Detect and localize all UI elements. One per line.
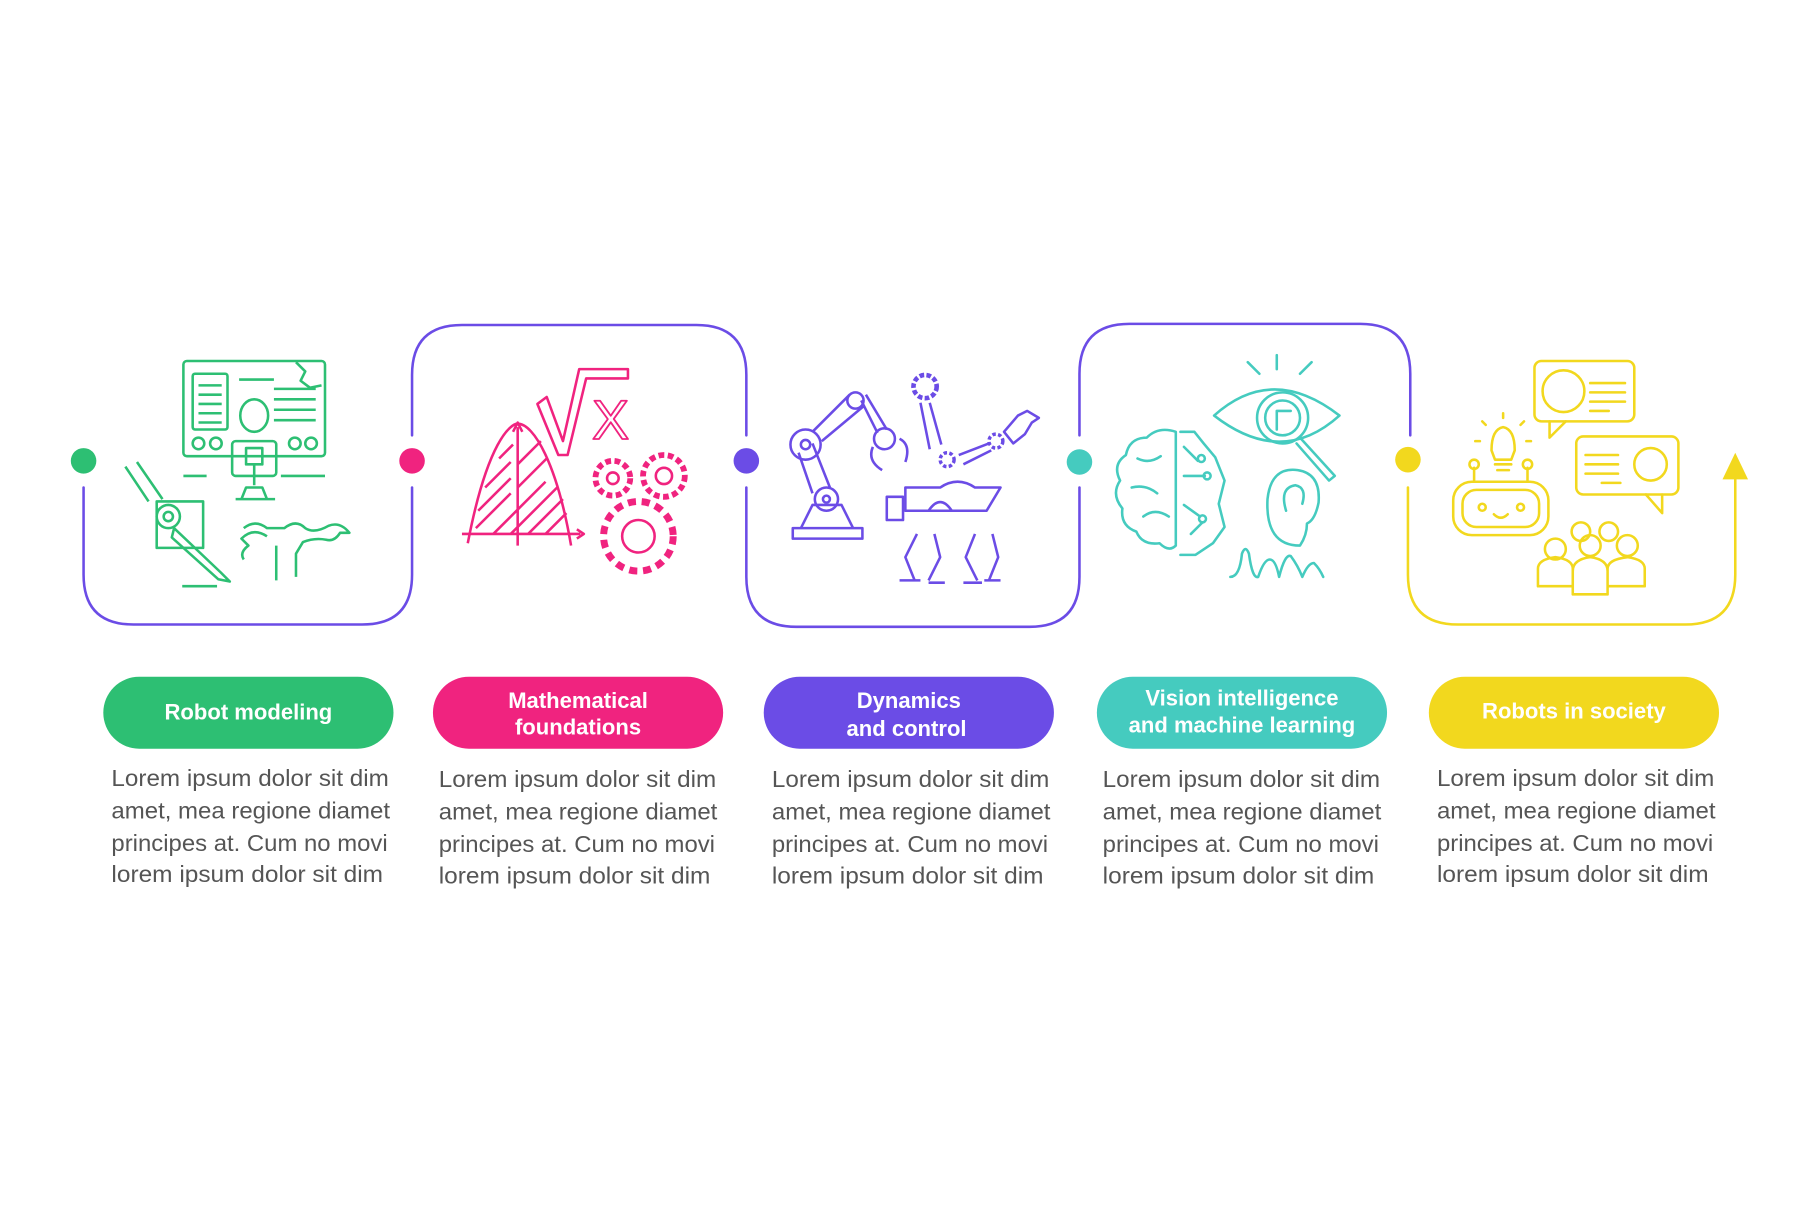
pill: Dynamics and control: Dynamics [857, 688, 961, 713]
dots [71, 447, 1421, 475]
text blocks: Lorem ipsum dolor sit dim [1437, 765, 1714, 791]
pill: Robot modeling: Robot modeling [165, 700, 332, 725]
text blocks: principes at. Cum no movi [439, 831, 715, 857]
text blocks: lorem ipsum dolor sit dim [111, 861, 383, 887]
text blocks: amet, mea regione diamet [1437, 797, 1716, 823]
icon: mathematical foundations [462, 369, 685, 571]
text blocks: lorem ipsum dolor sit dim [439, 862, 710, 888]
text blocks: Lorem ipsum dolor sit dim [111, 765, 389, 791]
text blocks: Lorem ipsum dolor sit dim [439, 766, 716, 792]
icon: robot modeling [125, 361, 349, 586]
text blocks: Lorem ipsum dolor sit dim [772, 766, 1049, 792]
text blocks: amet, mea regione diamet [772, 798, 1051, 824]
pill: Mathematical foundations [433, 677, 723, 749]
pill: Robot modeling [103, 677, 393, 749]
pill: Mathematical foundations: Mathematical [508, 688, 648, 713]
text blocks: amet, mea regione diamet [1103, 798, 1382, 824]
icon: dynamics and control [790, 375, 1039, 583]
timeline path [84, 324, 1735, 627]
icon: vision intelligence [1116, 355, 1339, 577]
pill: Vision intelligence and machine learning: Vision intelligence [1145, 686, 1339, 711]
pill: Mathematical foundations: foundations [515, 715, 641, 740]
pill: Dynamics and control [764, 677, 1054, 749]
pill: Vision intelligence and machine learning: and machine learning [1129, 712, 1355, 737]
text blocks: amet, mea regione diamet [439, 798, 718, 824]
text blocks: lorem ipsum dolor sit dim [772, 862, 1043, 888]
text blocks: principes at. Cum no movi [772, 831, 1048, 857]
pill: Robots in society: Robots in society [1482, 699, 1667, 724]
pill: Robots in society [1429, 677, 1719, 749]
text blocks: lorem ipsum dolor sit dim [1103, 862, 1374, 888]
pill: Vision intelligence and machine learning [1097, 677, 1387, 749]
text blocks: principes at. Cum no movi [1103, 831, 1379, 857]
icon: mathematical foundations: X [592, 389, 629, 451]
text blocks [111, 765, 1716, 888]
arrow head [1722, 453, 1748, 479]
text blocks: lorem ipsum dolor sit dim [1437, 861, 1709, 887]
text blocks: Lorem ipsum dolor sit dim [1103, 766, 1380, 792]
pill: Dynamics and control: and control [847, 716, 967, 741]
text blocks: principes at. Cum no movi [1437, 830, 1713, 856]
text blocks: amet, mea regione diamet [111, 797, 391, 823]
icon: robots in society [1453, 361, 1678, 594]
text blocks: principes at. Cum no movi [111, 830, 388, 856]
